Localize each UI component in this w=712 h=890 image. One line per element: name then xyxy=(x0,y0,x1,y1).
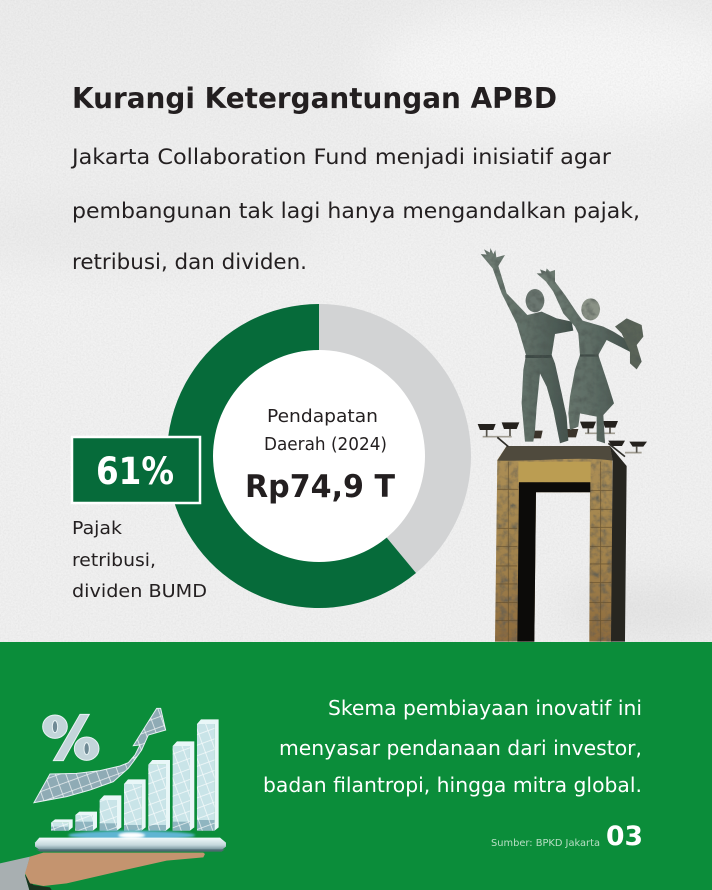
callout label: dividen BUMD xyxy=(72,581,207,602)
footer text block: Skema pembiayaan inovatif ini xyxy=(328,696,642,720)
monument: Selamat Datang statue xyxy=(478,248,647,642)
callout label: Pajak xyxy=(72,518,123,539)
panel: textured sand background xyxy=(0,0,712,642)
intro text block: retribusi, dan dividen. xyxy=(72,250,307,275)
callout: 61%: 61% xyxy=(96,450,174,493)
icon: percent sign xyxy=(43,714,99,761)
intro text block: pembangunan tak lagi hanya mengandalkan pajak, xyxy=(72,199,640,224)
icon: tower xyxy=(495,446,627,642)
icon: woman figure xyxy=(537,268,635,443)
icon: growth chart on tablet xyxy=(0,708,226,890)
icon: flower bouquet xyxy=(615,318,643,369)
icon: rising arrow xyxy=(34,708,166,803)
footer text block xyxy=(263,696,642,797)
callout label xyxy=(72,518,207,602)
donut centre label: Daerah (2024) xyxy=(264,434,387,455)
icon: floodlights xyxy=(478,421,647,457)
title: Kurangi Ketergantungan APBD xyxy=(72,82,557,115)
icon: rising bars xyxy=(51,719,219,831)
donut centre label: Pendapatan xyxy=(267,406,378,427)
intro text block: Jakarta Collaboration Fund menjadi inisiatif agar xyxy=(70,145,611,170)
donut centre label xyxy=(245,406,395,505)
panel: green footer band xyxy=(0,642,712,890)
page number: 03 xyxy=(606,821,643,852)
source note: Sumber: BPKD Jakarta xyxy=(491,838,600,849)
icon: hand and sleeve xyxy=(0,853,205,890)
footer text block: badan filantropi, hingga mitra global. xyxy=(263,773,642,797)
footer text block: menyasar pendanaan dari investor, xyxy=(279,736,642,760)
callout label: retribusi, xyxy=(72,550,156,571)
donut chart: regional revenue xyxy=(167,304,471,608)
intro text block xyxy=(70,145,640,275)
icon: man figure xyxy=(481,248,573,443)
callout: 61% xyxy=(72,437,200,503)
icon: tablet xyxy=(35,831,226,852)
donut centre label: Rp74,9 T xyxy=(245,469,395,505)
